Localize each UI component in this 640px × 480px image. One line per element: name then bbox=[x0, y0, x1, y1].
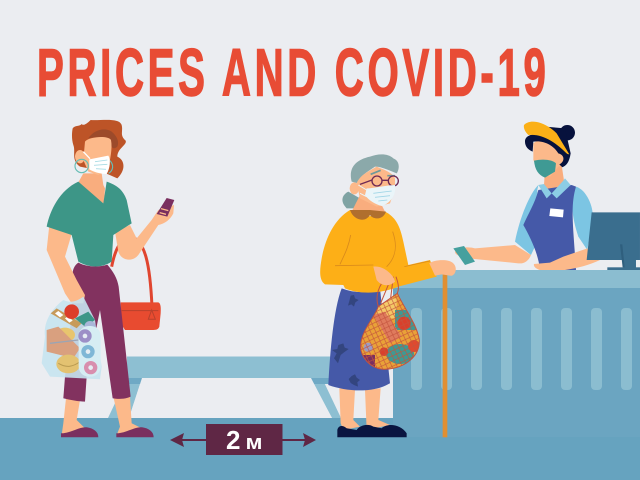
bag contents bbox=[360, 293, 420, 370]
jumper bbox=[320, 210, 437, 293]
shirt bbox=[47, 182, 132, 266]
distance label box bbox=[206, 424, 282, 455]
title: PRICES AND COVID-19 bbox=[37, 35, 546, 110]
cashier vest bbox=[523, 185, 576, 270]
shopping bag bbox=[42, 297, 102, 379]
phone bbox=[157, 198, 174, 217]
cashier forearm bbox=[534, 248, 600, 270]
cashier collar bbox=[538, 178, 571, 198]
bag outline bbox=[361, 293, 419, 369]
elderly hair bbox=[351, 154, 399, 183]
jumper collar bbox=[350, 210, 386, 220]
elderly neck bbox=[352, 195, 385, 212]
face mask bbox=[83, 152, 110, 174]
hair bun bbox=[342, 192, 360, 208]
cashier back hair bbox=[545, 127, 571, 167]
arrows bbox=[170, 433, 316, 447]
cashier badge bbox=[549, 208, 564, 217]
cashier cap bbox=[524, 122, 569, 154]
bag handles bbox=[377, 277, 398, 307]
cashier mask bbox=[534, 160, 556, 178]
elderly woman bbox=[320, 154, 456, 437]
handbag bbox=[121, 302, 161, 330]
shoes bbox=[61, 427, 154, 437]
payment card bbox=[453, 246, 475, 265]
floor bbox=[0, 418, 640, 480]
cashier bbox=[453, 122, 640, 271]
net bag bbox=[360, 277, 420, 370]
background bench bbox=[108, 356, 341, 418]
earrings bbox=[75, 159, 113, 173]
cane bbox=[443, 273, 447, 437]
cashier face bbox=[533, 141, 566, 177]
elderly ear bbox=[350, 182, 359, 194]
legs bbox=[62, 397, 142, 435]
distance marker bbox=[170, 424, 316, 455]
handbag strap bbox=[112, 237, 152, 307]
cashier hair bbox=[525, 134, 568, 167]
back hair bbox=[72, 120, 126, 178]
elderly shoes bbox=[337, 425, 407, 437]
cashier arm bbox=[455, 245, 531, 263]
counter bbox=[393, 270, 640, 437]
cashier neck bbox=[544, 165, 564, 195]
monitor bbox=[587, 212, 640, 271]
eyebrows bbox=[371, 170, 395, 176]
elderly legs bbox=[339, 388, 390, 430]
counter slots bbox=[411, 308, 632, 390]
distance label: 2 bbox=[226, 425, 240, 455]
bag groceries bbox=[47, 304, 101, 377]
neck bbox=[78, 173, 105, 204]
distance unit: м bbox=[246, 432, 262, 454]
counter body bbox=[393, 288, 640, 437]
left arm bbox=[47, 225, 85, 303]
skirt flowers bbox=[332, 295, 360, 387]
face bbox=[83, 137, 112, 175]
hand on cane bbox=[429, 260, 456, 276]
elderly mask bbox=[358, 185, 395, 206]
elderly face bbox=[357, 167, 395, 207]
counter top bbox=[393, 270, 640, 288]
woman with phone bbox=[42, 120, 174, 437]
skirt bbox=[328, 288, 390, 390]
hair shadow bbox=[88, 129, 118, 148]
pants bbox=[63, 263, 131, 402]
glasses bbox=[360, 176, 398, 186]
hand holding bag bbox=[373, 266, 395, 285]
cashier shirt bbox=[515, 185, 593, 255]
right arm bbox=[115, 205, 174, 260]
cashier hair bun bbox=[560, 125, 575, 140]
fingers on phone bbox=[160, 209, 168, 214]
ear bbox=[75, 150, 85, 163]
